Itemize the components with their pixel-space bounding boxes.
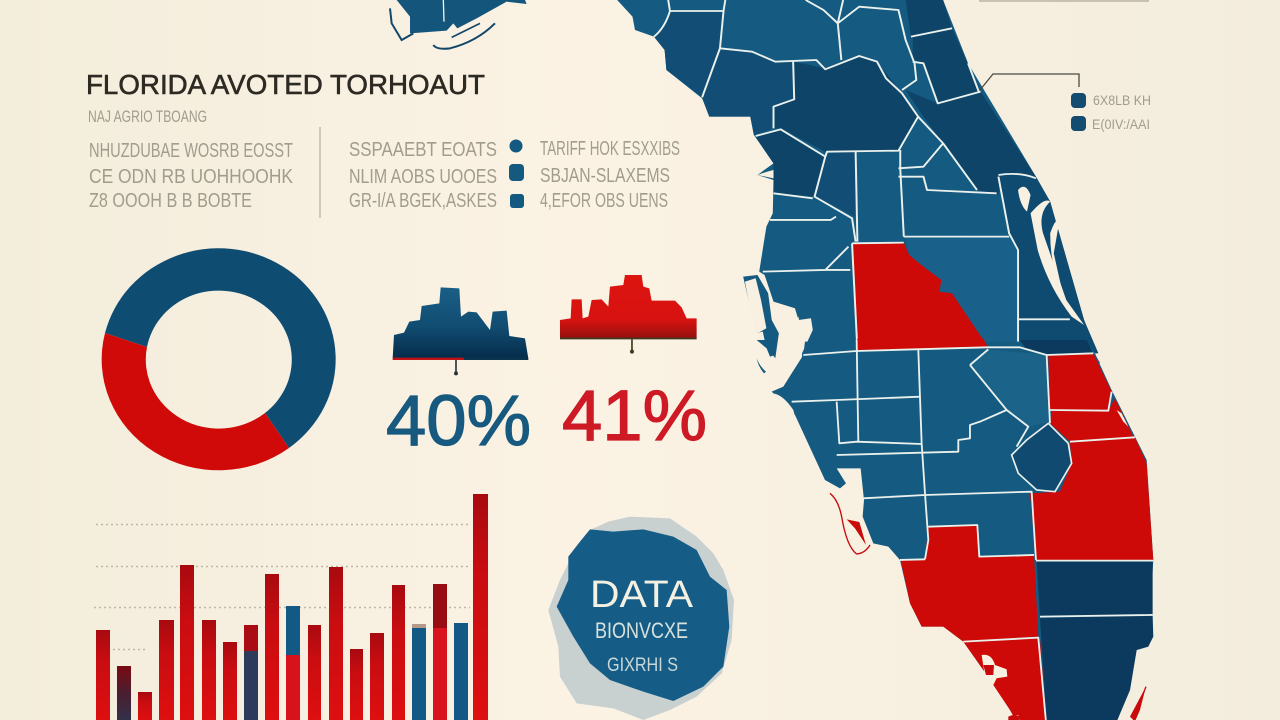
map: northern Florida	[617, 0, 1100, 363]
text block: middle column: NLIM AOBS UOOES	[349, 166, 497, 188]
subtitle: NAJ AGRIO TBOANG	[88, 107, 207, 126]
text block: right column: SBJAN-SLAXEMS	[540, 165, 670, 187]
text block: right column	[540, 138, 680, 212]
lighter county	[970, 349, 1050, 427]
data badge	[548, 517, 734, 720]
legend label 2: E(0IV:/AAI	[1092, 116, 1150, 132]
dark counties	[1020, 340, 1153, 720]
donut chart	[102, 248, 336, 470]
map legend	[1071, 92, 1151, 132]
land mass north	[617, 0, 1098, 363]
grid lines	[94, 524, 470, 650]
bay and lagoon shapes	[709, 128, 1084, 342]
lake county	[1012, 423, 1072, 492]
text block: left column: Z8 OOOH B B BOBTE	[89, 190, 252, 212]
legend label 1: 6X8LB KH	[1093, 92, 1151, 108]
land mass south	[772, 342, 1153, 720]
title: FLORIDA AVOTED TORHOAUT	[86, 69, 485, 100]
bar chart	[94, 494, 488, 720]
county borders	[792, 340, 1153, 720]
badge heading: DATA	[590, 574, 694, 616]
donut segment: red	[102, 333, 289, 470]
text block: middle column: GR-I/A BGEK,ASKES	[349, 190, 497, 212]
percentage: red: 41%	[562, 377, 707, 456]
text block: right column: 4,EFOR OBS UENS	[540, 190, 668, 212]
white coastal cut-outs	[773, 393, 1128, 720]
badge shadow	[548, 517, 734, 720]
lagoon county	[998, 174, 1098, 355]
mid-tone counties	[654, 11, 856, 217]
text block: middle column: SSPAAEBT EOATS	[349, 139, 497, 161]
red counties	[857, 338, 1153, 720]
top right rule	[979, 0, 1149, 2]
callout leader line	[980, 74, 1079, 90]
text block: left column: NHUZDUBAE WOSRB EOSST	[89, 140, 293, 162]
donut segment: blue	[105, 248, 336, 448]
red county	[852, 243, 988, 350]
skyline icon: blue	[393, 287, 528, 375]
percentage: blue: 40%	[386, 382, 531, 461]
red island shapes	[847, 519, 1146, 720]
dark counties	[756, 0, 1036, 197]
text block: right column: TARIFF HOK ESXXIBS	[540, 138, 680, 160]
red inlets	[830, 493, 1146, 717]
text block: left column: CE ODN RB UOHHOOHK	[89, 166, 294, 188]
map: southern Florida	[757, 338, 1153, 720]
lighter county	[906, 237, 1018, 347]
skyline icon: red	[560, 275, 697, 354]
legend swatch 1	[1071, 93, 1086, 108]
Pinellas peninsula	[743, 275, 779, 358]
badge line 2: GIXRHI S	[607, 655, 678, 676]
badge line 1: BIONVCXE	[595, 618, 688, 643]
divider line	[319, 127, 321, 218]
text block: middle column	[349, 139, 497, 212]
red county top east	[1047, 354, 1100, 363]
county borders	[654, 0, 1095, 362]
text block: left column	[89, 140, 294, 212]
dark keys	[757, 340, 775, 373]
bars	[96, 494, 488, 720]
legend markers	[509, 140, 524, 208]
legend swatch 2	[1071, 116, 1086, 131]
map fragment: top left coast	[390, 0, 527, 49]
badge blob	[557, 529, 729, 701]
